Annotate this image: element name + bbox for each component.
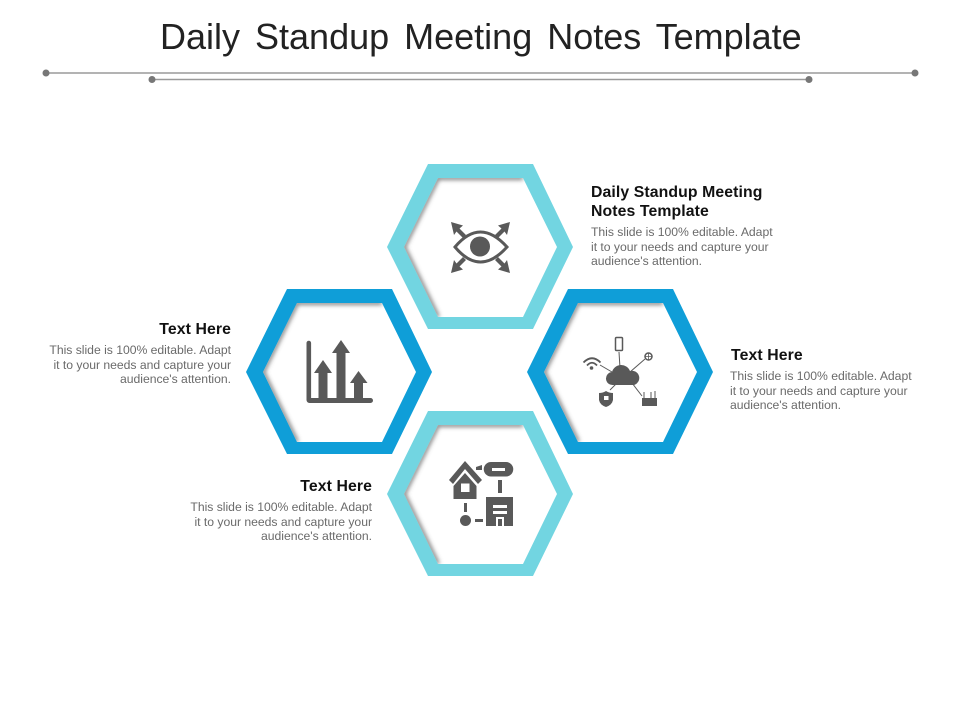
icon: home and building network [449,461,513,526]
body: left [49,343,231,386]
icon: cloud network [584,338,657,407]
hexagon: right [527,289,713,454]
heading: bottom: Text Here [300,478,372,495]
heading: top right: Daily Standup Meeting [591,184,762,201]
body: bottom [190,500,372,543]
heading: left: Text Here [159,321,231,338]
body: top right: audience's attention. [591,254,702,268]
body: left: audience's attention. [120,372,231,386]
title: Daily Standup Meeting Notes Template [160,16,802,57]
text block: right [730,347,912,412]
body: right [730,369,912,412]
hexagon: bottom [387,411,573,576]
body: bottom: This slide is 100% editable. Adapt [190,500,372,514]
body: right: This slide is 100% editable. Adapt [730,369,912,383]
icon: eye with arrows [451,222,510,273]
text block: top right [591,184,773,268]
icon: rising bar chart arrows [306,340,373,403]
hexagon: top [387,164,573,329]
hexagon: left [246,289,432,454]
body: top right: This slide is 100% editable. Adapt [591,225,773,239]
heading: top right [591,184,762,220]
text block: bottom [190,478,372,543]
body: right: audience's attention. [730,398,841,412]
body: left: it to your needs and capture your [53,358,231,372]
body: bottom: audience's attention. [261,529,372,543]
heading: top right: Notes Template [591,203,709,220]
body: top right: it to your needs and capture your [591,240,769,254]
body: top right [591,225,773,268]
body: left: This slide is 100% editable. Adapt [49,343,231,357]
title divider lines [42,70,918,83]
text block: left [49,321,231,386]
heading: right: Text Here [731,347,803,364]
hexagon diagram [246,164,713,576]
body: right: it to your needs and capture your [730,384,908,398]
body: bottom: it to your needs and capture your [194,514,372,528]
